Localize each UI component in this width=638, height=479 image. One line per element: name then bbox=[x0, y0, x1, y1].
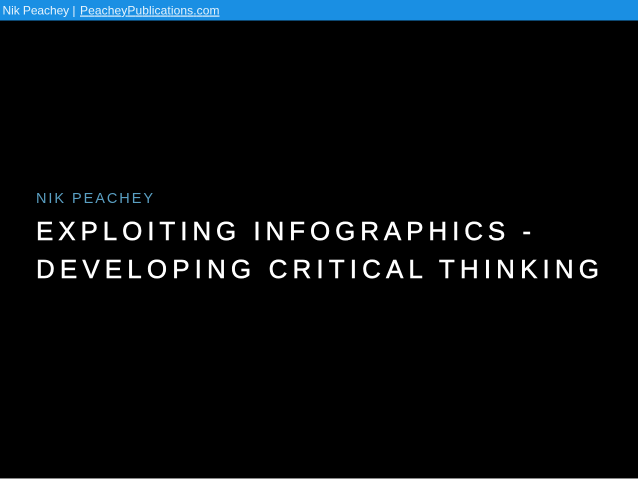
author name: NIK PEACHEY bbox=[36, 191, 153, 207]
main title bbox=[36, 216, 599, 284]
title line 1: EXPLOITING INFOGRAPHICS - bbox=[36, 216, 531, 246]
header bar bbox=[0, 0, 638, 20]
title line 2: DEVELOPING CRITICAL THINKING bbox=[36, 254, 599, 284]
header author text: Nik Peachey | bbox=[2, 4, 76, 18]
header link: PeacheyPublications.com bbox=[80, 4, 220, 18]
